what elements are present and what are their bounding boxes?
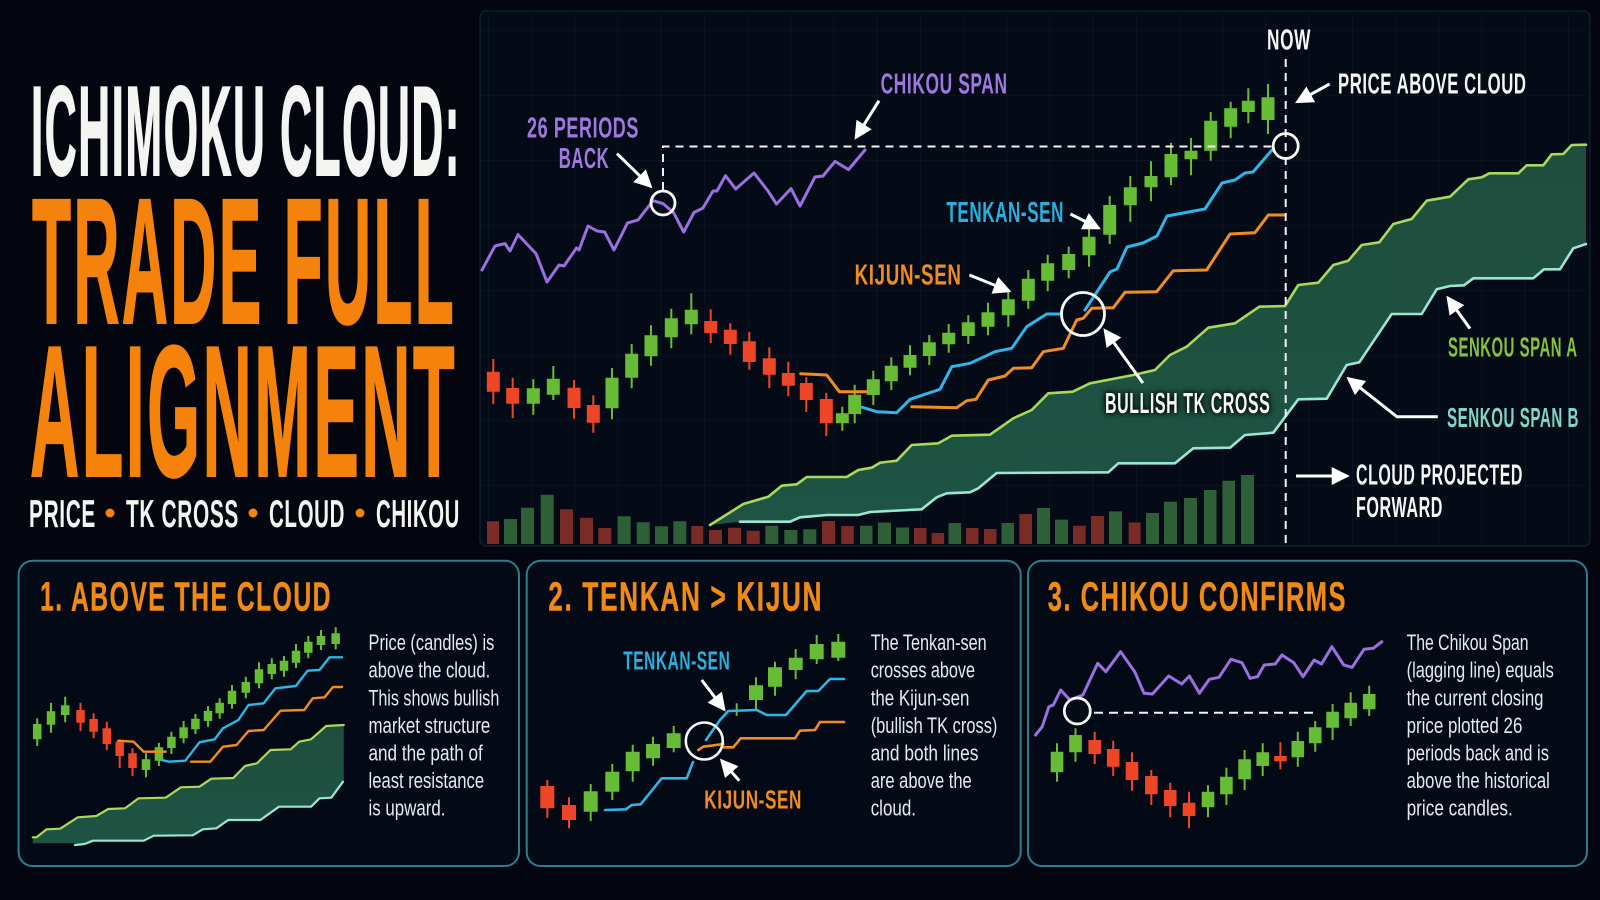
chart labels: 26 PERIODS	[527, 112, 639, 144]
subtitle checklist	[29, 493, 460, 536]
mini chart: chikou above candles	[1036, 642, 1382, 828]
panel 1: above the cloud	[19, 561, 519, 866]
text block 2: crosses above	[871, 658, 975, 683]
text block 2: are above the	[871, 768, 972, 793]
text block 1: market structure	[368, 713, 490, 738]
chart labels: BACK	[559, 143, 609, 175]
chart labels: CHIKOU SPAN	[881, 69, 1008, 101]
arrows	[617, 84, 1470, 476]
mini chart: TK cross: KIJUN-SEN	[704, 786, 802, 814]
text block 3: periods back and is	[1407, 740, 1549, 766]
text block 2: and both lines	[871, 740, 978, 766]
text block 1	[368, 630, 499, 821]
infographic canvas: ALIGNMENT	[30, 307, 457, 516]
mini chart: TK cross	[547, 634, 844, 828]
ichimoku cloud fill	[710, 145, 1586, 525]
chart labels	[527, 24, 1579, 524]
text block 2: (bullish TK cross)	[871, 713, 997, 738]
heading 3: 3. CHIKOU CONFIRMS	[1048, 574, 1347, 620]
subtitle checklist: CHIKOU	[376, 493, 460, 536]
mini chart: candles above cloud	[33, 627, 344, 845]
chart labels: TENKAN-SEN	[946, 197, 1064, 229]
text block 3: The Chikou Span	[1407, 630, 1529, 655]
text block 2: the Kijun-sen	[871, 685, 969, 710]
chart labels: NOW	[1267, 24, 1311, 56]
text block 1: and the path of	[368, 740, 483, 766]
text block 3: above the historical	[1407, 768, 1550, 793]
senkou span B line	[740, 244, 1586, 522]
senkou span A line	[710, 145, 1586, 525]
text block 2: cloud.	[871, 796, 916, 821]
volume bars	[487, 475, 1254, 544]
text block 1: above the cloud.	[368, 658, 490, 683]
tenkan-sen line	[862, 150, 1272, 413]
chart labels: BULLISH TK CROSS	[1105, 388, 1270, 420]
chart labels: FORWARD	[1356, 492, 1443, 524]
panel 2: tenkan above kijun	[527, 561, 1021, 866]
subtitle checklist: PRICE	[29, 493, 96, 536]
title block	[29, 60, 461, 536]
chikou span line	[482, 150, 865, 282]
text block 3: the current closing	[1407, 685, 1544, 710]
kijun-sen line	[801, 215, 1285, 408]
text block 3	[1407, 630, 1554, 821]
text block 2	[871, 630, 997, 821]
subtitle checklist: TK CROSS	[126, 493, 239, 536]
text block 3: price plotted 26	[1407, 713, 1522, 738]
text block 3: (lagging line) equals	[1407, 658, 1554, 683]
mini chart: TK cross: TENKAN-SEN	[623, 647, 730, 675]
text block 1: Price (candles) is	[368, 630, 494, 655]
infographic canvas: TRADE FULL	[32, 161, 456, 361]
text block 2: The Tenkan-sen	[871, 630, 987, 655]
heading 2: 2. TENKAN > KIJUN	[548, 574, 823, 620]
heading 1: 1. ABOVE THE CLOUD	[40, 574, 332, 620]
dashed guide lines	[663, 59, 1286, 543]
subtitle checklist: CLOUD	[269, 493, 345, 536]
panel: main ichimoku chart	[480, 11, 1590, 546]
candlesticks	[493, 84, 1268, 436]
panel 3: chikou confirms	[1028, 561, 1587, 866]
text block 1: This shows bullish	[368, 685, 499, 710]
text block 1: is upward.	[368, 796, 446, 821]
text block 1: least resistance	[368, 768, 484, 793]
chart labels: KIJUN-SEN	[855, 260, 962, 292]
text block 3: price candles.	[1407, 796, 1513, 821]
infographic canvas: ICHIMOKU CLOUD:	[31, 60, 461, 202]
circle markers	[651, 134, 1298, 336]
